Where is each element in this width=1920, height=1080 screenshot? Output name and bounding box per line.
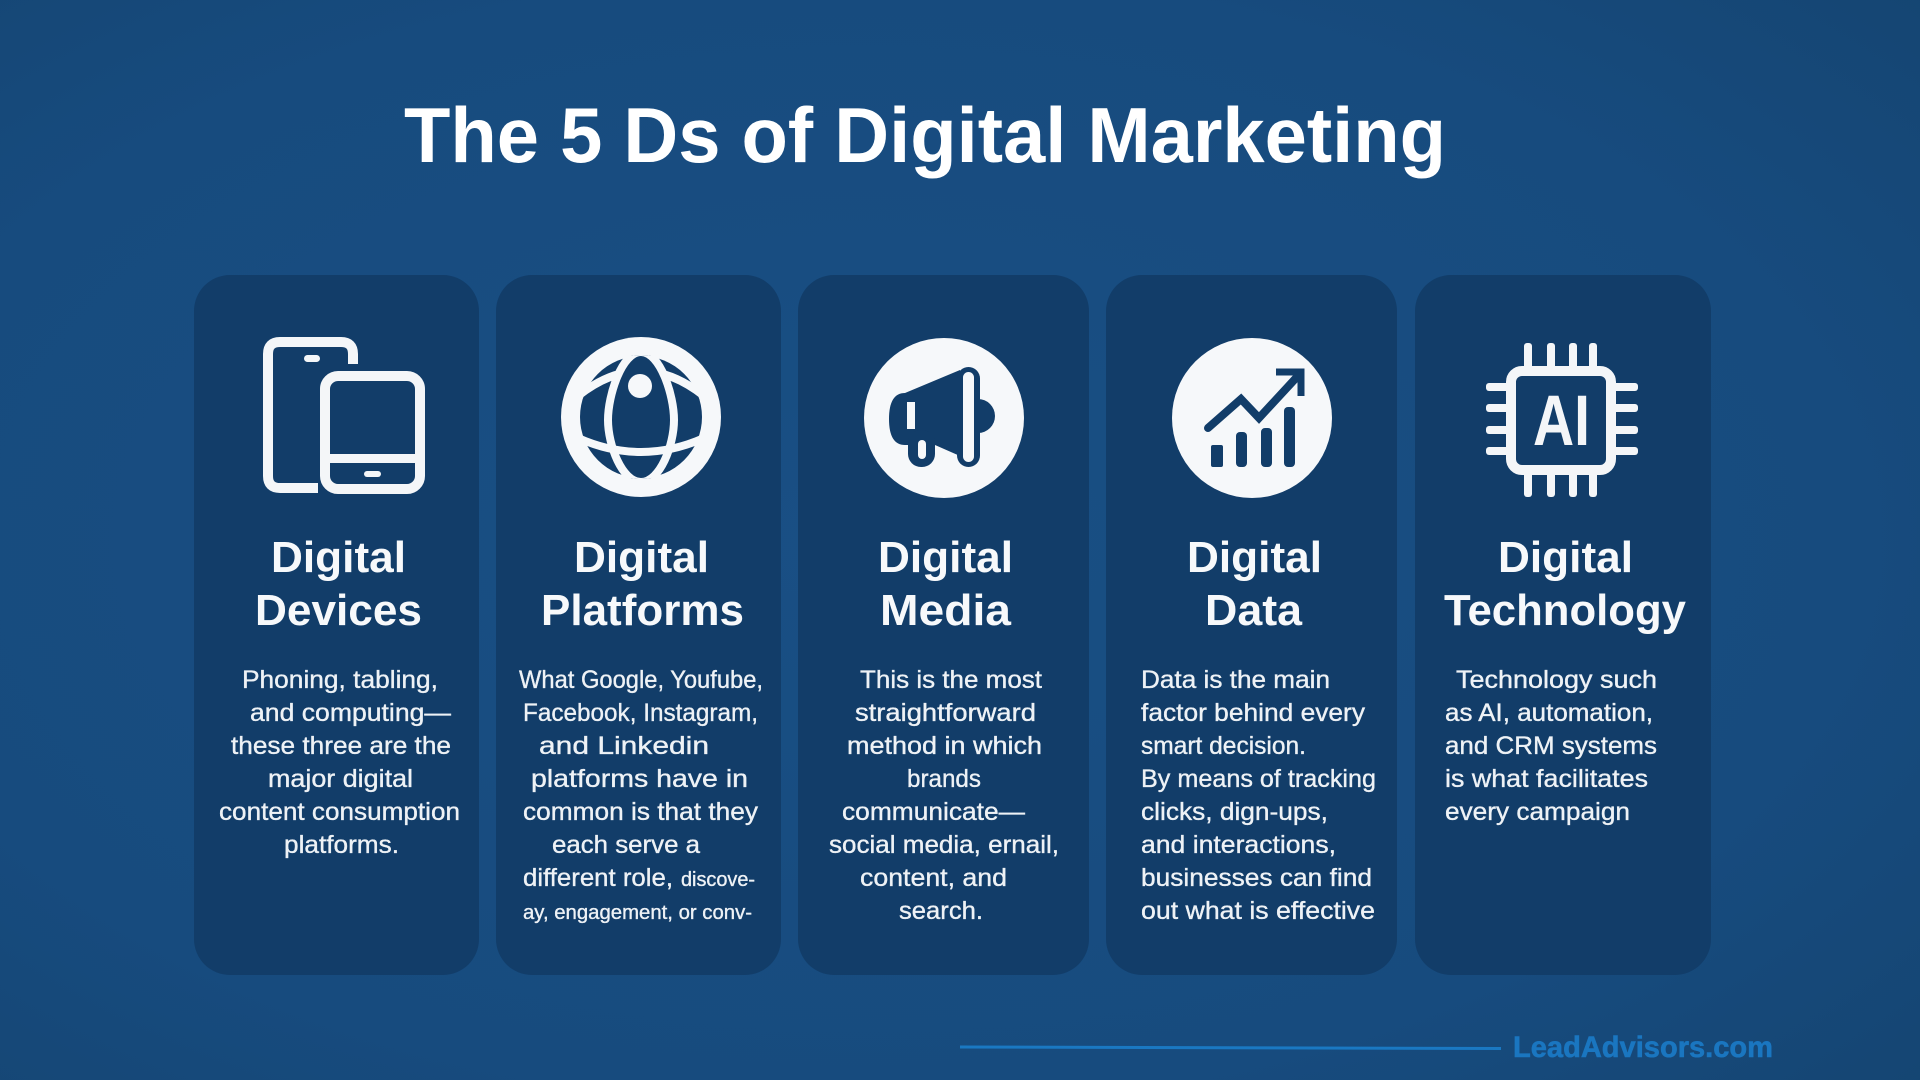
text: digital platforms description: different role,: [523, 864, 673, 892]
heading: digital technology: [1444, 533, 1687, 635]
text: digital devices description: and computing—: [250, 699, 451, 727]
icon: AI chip: [1486, 343, 1638, 497]
text: digital devices description: these three are the: [231, 732, 451, 760]
icon: megaphone: [864, 338, 1024, 498]
footer brand: LeadAdvisors.com: [1513, 1031, 1773, 1064]
heading: digital data: [1187, 533, 1322, 635]
text: digital devices description: platforms.: [284, 831, 399, 859]
text: digital platforms description: common is that they: [523, 798, 759, 826]
panel: digital data: [1106, 275, 1397, 975]
text: digital data description: factor behind every: [1141, 699, 1366, 727]
heading: digital media: Digital: [878, 533, 1013, 582]
text: digital media description: straightforward: [855, 699, 1036, 727]
text: digital platforms description: [519, 666, 763, 924]
text: digital media description: brands: [907, 765, 981, 793]
text: digital platforms description: and Linkedin: [539, 732, 709, 760]
footer rule: [960, 1046, 1501, 1050]
text: digital platforms description: each serve a: [552, 831, 700, 859]
heading: digital technology: Digital: [1498, 533, 1633, 582]
text: digital data description: smart decision.: [1141, 732, 1306, 760]
text: digital platforms description: What Google, Youfube,: [519, 666, 763, 694]
text: digital data description: [1141, 666, 1376, 925]
heading: digital devices: Digital: [271, 533, 406, 582]
heading: digital technology: Technology: [1444, 586, 1687, 635]
text: digital media description: communicate—: [842, 798, 1025, 826]
title: The 5 Ds of Digital Marketing: [404, 91, 1446, 179]
heading: digital data: Data: [1205, 586, 1303, 635]
text: digital technology description: as AI, automation,: [1445, 699, 1653, 727]
text: digital platforms description: Facebook, Instagram,: [523, 699, 758, 727]
icon: AI chip: AI: [1533, 382, 1590, 461]
text: digital data description: clicks, dign-ups,: [1141, 798, 1328, 826]
icon: growth chart: [1172, 338, 1332, 498]
text: digital platforms description: ay, engagement, or conv-: [523, 902, 752, 924]
text: digital media description: social media, ernail,: [829, 831, 1059, 859]
text: digital technology description: and CRM systems: [1445, 732, 1657, 760]
heading: digital media: [878, 533, 1013, 635]
heading: digital platforms: [541, 533, 744, 635]
text: digital devices description: content consumption: [219, 798, 460, 826]
text: digital media description: This is the most: [860, 666, 1042, 694]
icon: globe with rocket: [561, 337, 721, 497]
text: digital data description: Data is the main: [1141, 666, 1330, 694]
text: digital technology description: [1445, 666, 1657, 826]
panel: digital platforms: [496, 275, 781, 975]
text: digital data description: By means of tracking: [1141, 765, 1376, 793]
text: digital devices description: major digital: [268, 765, 413, 793]
heading: digital media: Media: [880, 586, 1012, 635]
text: digital media description: content, and: [860, 864, 1007, 892]
text: digital devices description: [219, 666, 460, 859]
text: digital technology description: Technology such: [1456, 666, 1657, 694]
heading: digital data: Digital: [1187, 533, 1322, 582]
heading: digital platforms: Platforms: [541, 586, 744, 635]
heading: digital devices: Devices: [255, 586, 422, 635]
text: digital data description: businesses can find: [1141, 864, 1372, 892]
text: digital platforms description: platforms have in: [531, 765, 748, 793]
panel: digital devices: [194, 275, 479, 975]
text: digital data description: and interactions,: [1141, 831, 1336, 859]
panel: digital technology: [1415, 275, 1711, 975]
text: digital data description: out what is effective: [1141, 897, 1375, 925]
text: digital technology description: every campaign: [1445, 798, 1630, 826]
panel: digital media: [798, 275, 1089, 975]
text: digital media description: [829, 666, 1059, 925]
heading: digital platforms: Digital: [574, 533, 709, 582]
icon: phone and tablet: [268, 342, 420, 489]
text: digital technology description: is what facilitates: [1445, 765, 1648, 793]
text: digital media description: search.: [899, 897, 983, 925]
text: digital devices description: Phoning, tabling,: [242, 666, 438, 694]
heading: digital devices: [255, 533, 422, 635]
text: digital media description: method in which: [847, 732, 1042, 760]
text: digital platforms description: discove-: [681, 869, 755, 891]
